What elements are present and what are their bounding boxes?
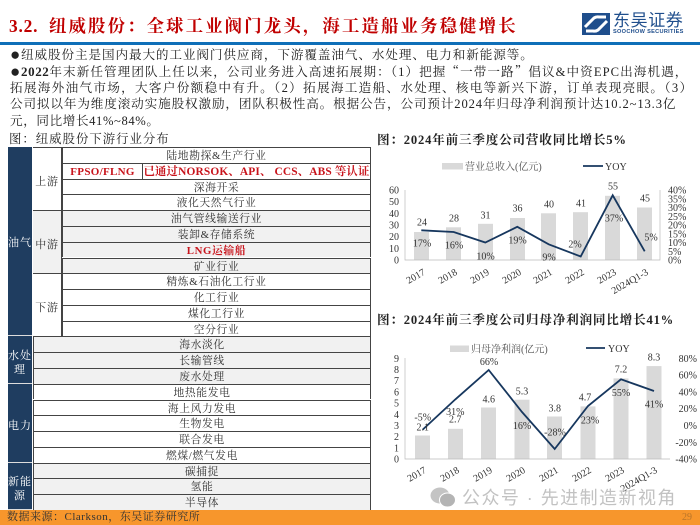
row: 联合发电 (179, 434, 225, 446)
row: 液化天然气行业 (177, 197, 256, 209)
category labels: 2017 (406, 465, 428, 485)
YOY labels: 16% (513, 421, 531, 432)
left axis labels: 7 (394, 376, 399, 387)
row: 废水处理 (179, 371, 225, 383)
YOY labels (413, 214, 658, 264)
row (62, 210, 371, 226)
YOY labels: 37% (605, 214, 623, 224)
value labels: 24 (417, 218, 427, 228)
YOY labels: 41% (645, 400, 663, 410)
value labels: 31 (480, 210, 490, 222)
title: 3.2. (9, 16, 38, 36)
left axis labels: 6 (394, 387, 399, 398)
bullet two line one: 2022年末新任管理团队上任以来，公司业务进入高速拓展期：（1）把握“一带一路”倡议&中资EPC出海机遇， (21, 61, 688, 80)
category labels: 2018 (437, 267, 460, 287)
row: 氢能 (191, 481, 213, 493)
legend: YOY (608, 344, 630, 355)
category labels: 2018 (439, 465, 462, 485)
heading: revenue chart: 图：2024年前三季度公司营收同比增长5% (377, 133, 627, 147)
right axis labels: 60% (679, 371, 697, 382)
value labels: 40 (544, 200, 554, 210)
YOY line (421, 195, 645, 256)
YOY labels: 5% (644, 232, 658, 244)
left axis labels: 9 (394, 354, 399, 365)
row: 半导体 (185, 497, 219, 509)
right axis labels: -20% (675, 438, 697, 449)
value labels: 4.6 (482, 394, 495, 406)
row (33, 400, 371, 415)
right axis labels: 40% (679, 387, 697, 398)
source note: 数据来源：Clarkson，东吴证券研究所 (7, 511, 200, 523)
legend (450, 342, 630, 356)
left axis labels: 60 (389, 186, 399, 196)
row: FPSO/FLNG label: FPSO/FLNG (70, 166, 135, 178)
row (33, 431, 371, 447)
category labels: 2017 (405, 267, 428, 287)
category labels: 2021 (532, 267, 554, 287)
body text (10, 45, 693, 128)
bullet two line two: 拓展海外油气市场，大客户份额稳中有升。（2）拓展海工造船、水处理、核电等新兴下游，订单表现亮眼。（3） (10, 81, 693, 95)
sub-category: midstream: 中游 (35, 239, 59, 251)
category labels: 2022 (571, 465, 594, 485)
left axis labels: 20 (389, 232, 399, 243)
value labels: 55 (608, 182, 618, 192)
left axis labels: 5 (394, 399, 399, 410)
sub-category: midstream (33, 210, 62, 273)
YOY labels: 17% (413, 238, 431, 250)
row (62, 289, 371, 305)
left axis labels: 1 (394, 443, 399, 454)
right axis labels: 35% (668, 194, 686, 205)
row (33, 478, 371, 494)
row: 陆地勘探&生产行业 (166, 150, 267, 162)
legend: YOY (605, 162, 627, 173)
value labels: 8.3 (648, 352, 660, 364)
left axis labels: 0 (394, 256, 399, 266)
icon: chat bubbles (430, 488, 455, 506)
category: new energy (8, 463, 32, 510)
left axis labels: 10 (389, 244, 399, 255)
row (33, 368, 371, 384)
row (33, 352, 371, 368)
right axis labels: 0% (684, 421, 697, 432)
logo wordmark: 东吴证券 (613, 11, 683, 30)
row: 生物发电 (179, 418, 225, 430)
left axis labels (389, 186, 399, 266)
row: FPSO/FLNG label (62, 163, 143, 179)
right axis labels: 25% (668, 212, 686, 223)
row: 矿业行业 (194, 260, 239, 272)
row (33, 336, 371, 352)
sub-category: upstream: 上游 (35, 176, 59, 188)
category labels: 2023 (604, 465, 626, 485)
bullet two line four: 元，同比增长41%~84%。 (10, 114, 160, 128)
watermark text: 公众号 · 先进制造新视角 (462, 488, 677, 508)
right axis labels: 5% (668, 247, 681, 258)
legend: 营业总收入(亿元) (465, 160, 542, 173)
YOY labels: 9% (542, 252, 556, 264)
icon: logo mark (582, 13, 610, 35)
left axis labels: 0 (394, 454, 399, 466)
row (33, 415, 371, 431)
row: 煤化工行业 (188, 308, 245, 320)
YOY labels: 10% (476, 252, 495, 262)
row: 海上风力发电 (168, 402, 236, 414)
category labels: 2020 (505, 465, 528, 485)
category: water treatment (8, 336, 32, 384)
YOY labels: 55% (612, 388, 630, 399)
category labels: 2019 (469, 267, 492, 287)
row: 化工行业 (194, 292, 239, 304)
legend: 归母净利润(亿元) (471, 342, 548, 356)
category labels: 2020 (501, 267, 524, 287)
value labels: 45 (640, 194, 650, 204)
right axis labels (675, 354, 697, 466)
YOY labels: -5% (414, 412, 431, 424)
heading: table: 图：纽威股份下游行业分布 (9, 132, 170, 146)
YOY line (423, 370, 654, 449)
left axis labels: 40 (389, 209, 399, 220)
row (33, 463, 371, 478)
YOY labels: 2% (568, 240, 582, 250)
bullet one: 纽威股份主是国内最大的工业阀门供应商，下游覆盖油气、水处理、电力和新能源等。 (21, 48, 534, 62)
row: LNG carrier: LNG运输船 (187, 245, 246, 257)
title: 纽威股份：全球工业阀门龙头，海工造船业务稳健增长 (49, 16, 518, 36)
category labels: 2021 (538, 465, 560, 485)
row: FPSO/FLNG certification: 已通过NORSOK、API、 CCS、ABS 等认证 (143, 166, 370, 178)
left axis labels: 3 (394, 421, 399, 432)
category labels: 2022 (564, 267, 586, 287)
right axis labels: 0% (668, 256, 681, 266)
left axis labels (394, 354, 399, 466)
panel: downstream industries table (8, 147, 371, 510)
YOY labels: 66% (480, 357, 498, 368)
row: 油气管线输送行业 (171, 213, 262, 225)
sub-category: upstream (33, 147, 62, 210)
row (33, 447, 371, 463)
category labels: 2019 (472, 465, 494, 485)
row (62, 321, 371, 336)
category: oil and gas (8, 147, 32, 336)
category labels: 2024Q1-3 (619, 465, 660, 495)
YOY labels (414, 357, 663, 438)
value labels: 7.2 (615, 364, 627, 376)
right axis labels: 80% (679, 354, 697, 365)
row: 长输管线 (179, 355, 225, 367)
value labels (416, 352, 660, 434)
footer bar (0, 510, 700, 525)
category labels (406, 465, 660, 495)
value labels: 2.7 (449, 414, 462, 426)
sub-category: downstream: 下游 (35, 302, 59, 314)
row: 空分行业 (194, 324, 239, 336)
YOY labels: 16% (445, 240, 463, 252)
value labels: 4.7 (579, 392, 591, 404)
right axis labels: 15% (668, 229, 686, 240)
row: 深海开采 (194, 182, 239, 194)
category: water treatment: 理 (14, 364, 26, 376)
row (62, 147, 371, 163)
legend (442, 160, 627, 173)
row: LNG carrier (62, 242, 371, 257)
row (62, 226, 371, 242)
category labels: 2024Q1-3 (610, 267, 650, 297)
right axis labels: -40% (675, 454, 697, 466)
left axis labels: 30 (389, 220, 399, 232)
value labels: 36 (512, 204, 522, 214)
category: power: 电力 (8, 420, 32, 432)
row: 海水淡化 (179, 339, 225, 351)
page number: 29 (682, 512, 692, 523)
category: new energy: 源 (14, 490, 26, 502)
right axis labels: 40% (668, 186, 686, 196)
right axis labels: 20% (668, 220, 686, 232)
left axis labels: 2 (394, 432, 399, 443)
category: oil and gas: 油气 (8, 237, 32, 249)
right axis labels: 20% (679, 404, 697, 415)
sub-category: downstream (33, 273, 62, 336)
bars (414, 196, 652, 260)
bullet two line three: 公司拟以年为维度滚动实施股权激励，团队积极性高。根据公告，公司预计2024年归母净利润预计达10.2~13.3亿 (10, 97, 676, 111)
row (62, 258, 371, 273)
category: power (8, 384, 32, 463)
row: 精炼&石油化工行业 (166, 276, 267, 288)
logo: Soochow Securities (582, 11, 684, 35)
heading: net profit chart: 图：2024年前三季度公司归母净利润同比增长41% (377, 313, 674, 327)
left axis labels: 4 (394, 410, 399, 421)
value labels: 28 (449, 214, 459, 224)
logo subtitle: SOOCHOW SECURITIES (613, 29, 684, 35)
row (62, 179, 371, 194)
category: water treatment: 水处 (8, 350, 32, 362)
axes (405, 358, 670, 459)
value labels: 2.1 (416, 422, 429, 434)
row (33, 384, 371, 399)
axes (405, 190, 660, 260)
YOY labels: -28% (544, 428, 566, 438)
row (62, 194, 371, 210)
YOY labels: 31% (446, 407, 464, 418)
YOY labels: 23% (581, 416, 599, 426)
header divider (0, 42, 700, 44)
value labels: 41 (576, 198, 586, 210)
row (62, 305, 371, 321)
value labels: 3.8 (548, 404, 561, 414)
value labels: 5.3 (516, 386, 528, 398)
row (62, 273, 371, 289)
row: 燃煤/燃气发电 (166, 450, 238, 462)
category: new energy: 新能 (8, 476, 32, 488)
right axis labels: 30% (668, 203, 686, 214)
watermark (430, 488, 677, 508)
left axis labels: 50 (389, 197, 399, 208)
row: 装卸&存储系统 (178, 229, 255, 241)
YOY labels: 19% (508, 236, 527, 246)
left axis labels: 8 (394, 365, 399, 376)
bullet two line one: ● (10, 62, 20, 81)
row: 碳捕捉 (185, 466, 219, 478)
category labels: 2023 (596, 267, 618, 287)
value labels (417, 182, 650, 228)
right axis labels: 10% (668, 238, 686, 249)
row (33, 494, 371, 510)
bullet one: ● (10, 45, 20, 64)
row: 地热能发电 (174, 387, 230, 399)
category labels (405, 267, 650, 297)
right axis labels (668, 186, 686, 266)
bars (415, 366, 662, 459)
